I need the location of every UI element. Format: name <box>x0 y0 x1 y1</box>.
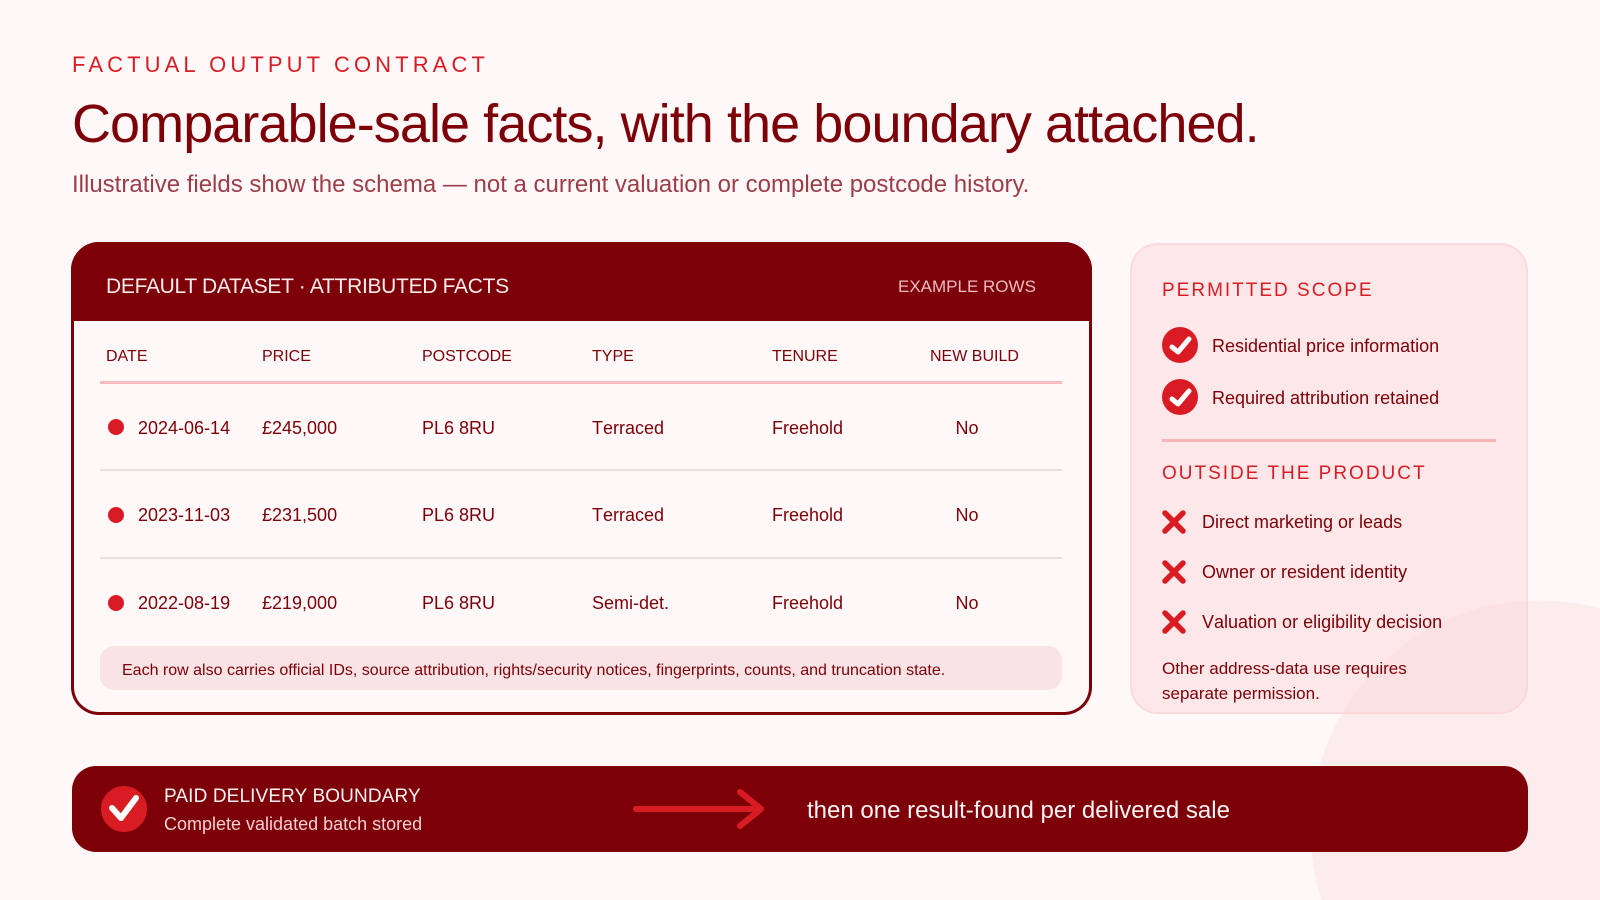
column headers: NEW BUILD <box>930 348 1019 365</box>
row 2023-11-03: Freehold <box>772 505 843 525</box>
title: Comparable-sale facts, with the boundary attached. <box>72 94 1259 154</box>
arrow <box>633 789 764 829</box>
row 2024-06-14: £245,000 <box>262 418 337 438</box>
column headers: TYPE <box>592 348 634 365</box>
icon: cross <box>1162 610 1186 634</box>
row 2024-06-14 <box>108 418 979 438</box>
row 2022-08-19 <box>108 593 979 613</box>
row 2024-06-14: PL6 8RU <box>422 418 495 438</box>
excluded item: valuation: Valuation or eligibility decision <box>1202 612 1442 632</box>
eyebrow: FACTUAL OUTPUT CONTRACT <box>72 52 489 77</box>
example rows tag: EXAMPLE ROWS <box>898 277 1036 296</box>
row 2024-06-14: 2024-06-14 <box>138 418 230 438</box>
boundary subtext: Complete validated batch stored <box>164 814 422 834</box>
subtitle: Illustrative fields show the schema — not a current valuation or complete postcode history. <box>72 171 1029 198</box>
boundary heading: PAID DELIVERY BOUNDARY <box>164 786 421 807</box>
permitted item: attribution <box>1162 379 1439 415</box>
panel: default dataset table <box>71 242 1092 715</box>
excluded item: direct marketing: Direct marketing or leads <box>1202 512 1402 532</box>
row 2023-11-03: No <box>955 505 979 525</box>
excluded item: owner identity <box>1162 560 1408 584</box>
icon: cross <box>1162 510 1186 534</box>
row 2022-08-19: PL6 8RU <box>422 593 495 613</box>
row 2023-11-03: £231,500 <box>262 505 337 525</box>
row 2022-08-19: £219,000 <box>262 593 337 613</box>
table header band <box>71 242 1092 321</box>
row 2024-06-14: No <box>955 418 979 438</box>
column headers: DATE <box>106 348 147 365</box>
permission note: Other address-data use requires <box>1162 659 1407 678</box>
excluded item: direct marketing <box>1162 510 1402 534</box>
permission note <box>1162 659 1407 703</box>
icon: check <box>101 786 147 832</box>
icon: cross <box>1162 560 1186 584</box>
row 2022-08-19: 2022-08-19 <box>138 593 230 613</box>
excluded item: owner identity: Owner or resident identity <box>1202 562 1407 582</box>
decorative background circle <box>1300 590 1600 900</box>
permitted item: residential price <box>1162 327 1439 363</box>
permission note: separate permission. <box>1162 684 1320 703</box>
row 2022-08-19: Freehold <box>772 593 843 613</box>
heading: outside the product: OUTSIDE THE PRODUCT <box>1162 463 1427 484</box>
permitted item: residential price: Residential price information <box>1212 336 1439 356</box>
row 2023-11-03 <box>108 505 979 525</box>
column headers: PRICE <box>262 348 311 365</box>
panel: scope <box>1130 243 1528 714</box>
footnote bar: Each row also carries official IDs, source attribution, rights/security notices, fingerprints, counts, and truncation state. <box>122 662 945 679</box>
result statement: then one result-found per delivered sale <box>807 797 1230 824</box>
icon: check <box>1162 327 1198 363</box>
row 2022-08-19: No <box>955 593 979 613</box>
row 2023-11-03: Terraced <box>592 505 664 525</box>
row 2022-08-19: Semi-det. <box>592 593 669 613</box>
row 2023-11-03: 2023-11-03 <box>138 505 230 525</box>
column headers: POSTCODE <box>422 348 512 365</box>
bottom bar: paid delivery boundary <box>72 766 1528 852</box>
dataset heading: DEFAULT DATASET · ATTRIBUTED FACTS <box>106 275 509 298</box>
row 2024-06-14: Freehold <box>772 418 843 438</box>
heading: permitted scope: PERMITTED SCOPE <box>1162 280 1374 301</box>
permitted item: attribution: Required attribution retained <box>1212 388 1439 408</box>
footnote bar <box>100 646 1062 690</box>
row 2024-06-14: Terraced <box>592 418 664 438</box>
row 2023-11-03: PL6 8RU <box>422 505 495 525</box>
icon: check <box>1162 379 1198 415</box>
column headers: TENURE <box>772 348 838 365</box>
column headers <box>100 342 1062 384</box>
